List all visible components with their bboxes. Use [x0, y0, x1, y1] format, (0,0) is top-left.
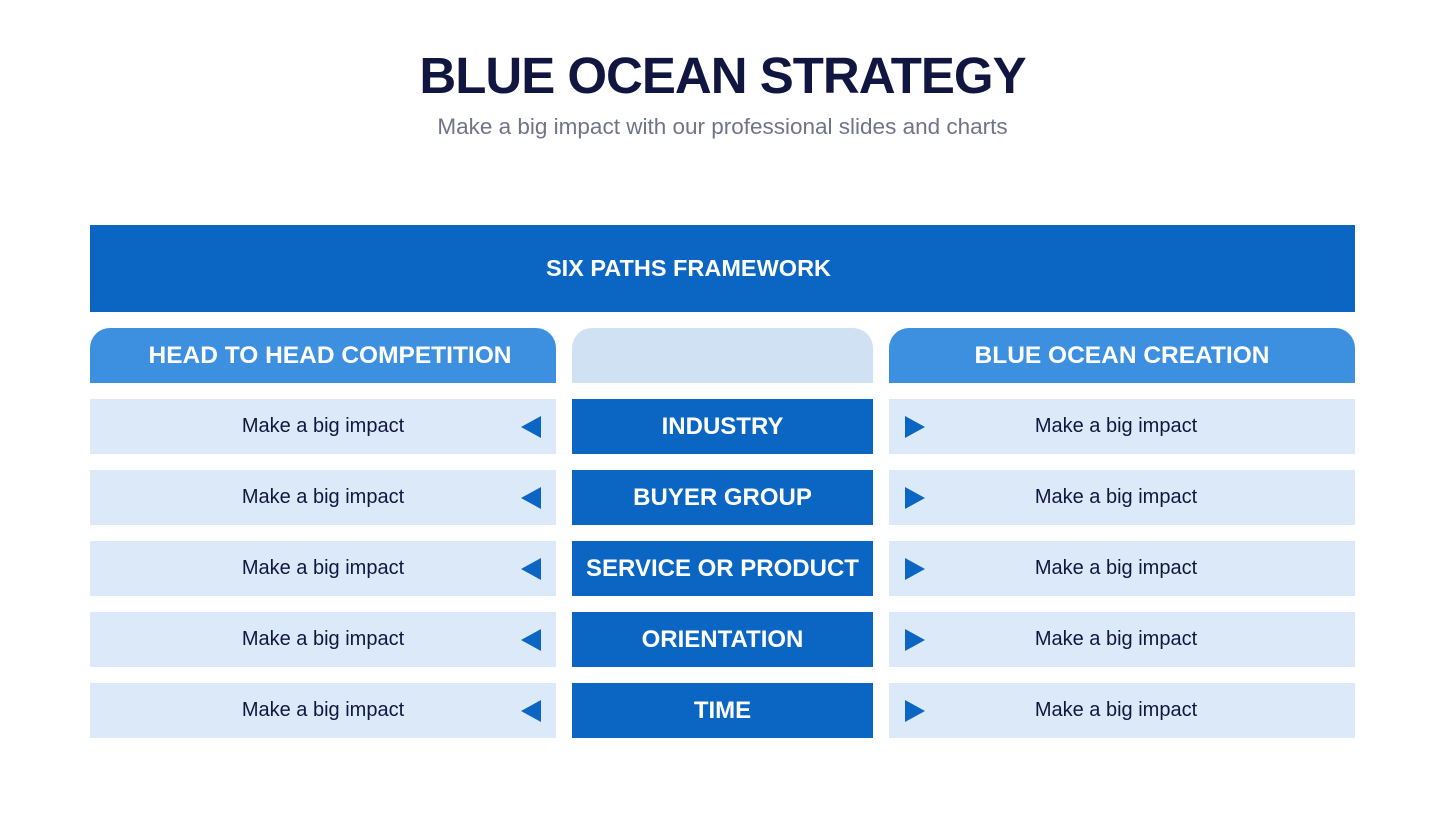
middle label: SERVICE OR PRODUCT: [586, 554, 859, 582]
middle label: BUYER GROUP: [633, 484, 812, 510]
middle label: INDUSTRY: [662, 412, 783, 440]
right cell: Make a big impact: [1035, 557, 1197, 579]
row: industry: [90, 399, 1355, 454]
middle label: ORIENTATION: [642, 626, 803, 652]
right cell: Make a big impact: [1035, 628, 1197, 650]
left cell: Make a big impact: [242, 486, 404, 508]
right cell: [889, 541, 1355, 596]
title: BLUE OCEAN STRATEGY: [419, 47, 1026, 104]
right cell: [889, 612, 1355, 667]
left cell: Make a big impact: [242, 699, 404, 721]
middle label: [572, 399, 873, 454]
middle label: [572, 612, 873, 667]
left cell: [90, 683, 556, 738]
row: orientation: [90, 612, 1355, 667]
left cell: Make a big impact: [242, 557, 404, 579]
row: service or product: [90, 541, 1355, 596]
middle label: [572, 541, 873, 596]
right cell: Make a big impact: [1035, 415, 1197, 437]
left cell: Make a big impact: [242, 415, 404, 437]
header: blue ocean creation: BLUE OCEAN CREATION: [975, 342, 1269, 368]
right cell: [889, 683, 1355, 738]
left cell: Make a big impact: [242, 628, 404, 650]
header: head to head competition: HEAD TO HEAD COMPETITION: [148, 342, 511, 368]
banner: six paths framework: SIX PATHS FRAMEWORK: [546, 255, 831, 281]
left cell: [90, 470, 556, 525]
right cell: [889, 470, 1355, 525]
right cell: Make a big impact: [1035, 699, 1197, 721]
header: head to head competition: [90, 328, 556, 383]
header: blue ocean creation: [889, 328, 1355, 383]
row: buyer group: [90, 470, 1355, 525]
right cell: Make a big impact: [1035, 486, 1197, 508]
row: time: [90, 683, 1355, 738]
banner: six paths framework: [90, 225, 1355, 312]
header: middle blank: [572, 328, 873, 383]
middle label: [572, 470, 873, 525]
middle label: TIME: [694, 696, 751, 724]
subtitle: Make a big impact with our professional slides and charts: [437, 114, 1008, 139]
right cell: [889, 399, 1355, 454]
middle label: [572, 683, 873, 738]
left cell: [90, 612, 556, 667]
left cell: [90, 399, 556, 454]
left cell: [90, 541, 556, 596]
